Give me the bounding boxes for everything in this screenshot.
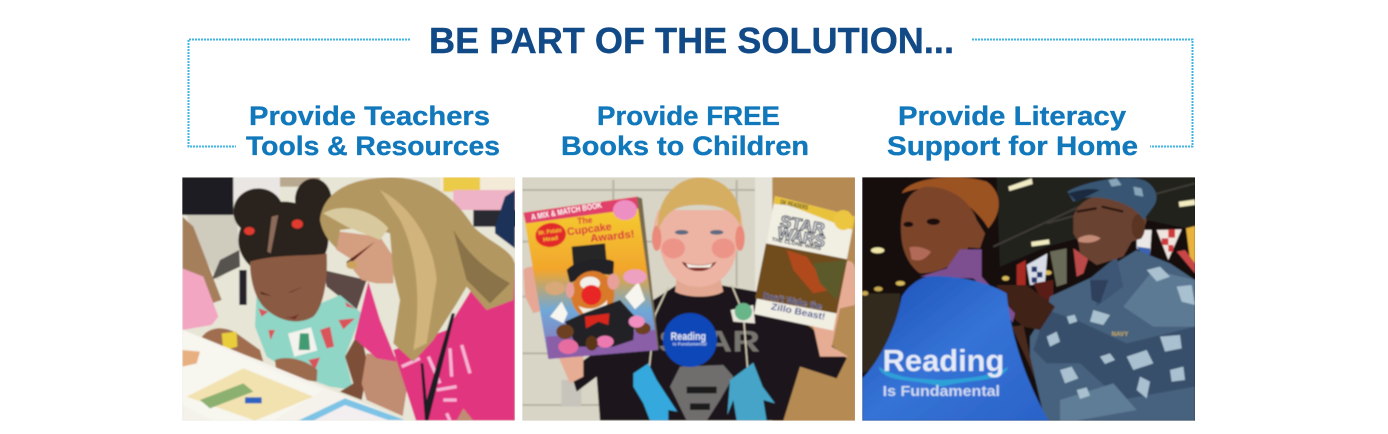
book 1 cover text: The (577, 215, 593, 226)
heading: free books column: Provide FREE (597, 101, 780, 131)
shirt print (illegible in source, drawn as strokes) (402, 345, 470, 421)
heading: teachers column: Tools & Resources (246, 131, 500, 161)
child collar (920, 249, 1015, 323)
arms and hands (523, 266, 540, 314)
teacher face (335, 231, 394, 284)
photo: teacher reading with girl (180, 170, 520, 427)
teacher arm & shirt (362, 353, 407, 416)
child face (901, 187, 985, 273)
man face (1073, 194, 1147, 265)
book 2 cover text (762, 199, 827, 322)
title: BE PART OF THE SOLUTION... (429, 20, 954, 61)
heading: free books column (561, 101, 809, 161)
photo: navy sailor and child in cape (860, 170, 1200, 427)
cape logo (878, 348, 1008, 398)
cape logo: Is Fundamental (883, 384, 1000, 400)
face (654, 210, 743, 287)
man cap (1067, 178, 1157, 220)
uniform name tape: NAVY (1112, 331, 1129, 338)
girl arms (200, 328, 263, 362)
photo: boy holding books (520, 170, 860, 427)
book 1 cover text: Awards! (590, 228, 635, 245)
left book (523, 197, 658, 359)
book 2 cover text: Don't Wake the (762, 290, 823, 312)
signal flags (1027, 253, 1047, 285)
girl face (250, 253, 327, 321)
heading: literacy support column (887, 101, 1138, 161)
heading: free books column: Books to Children (561, 131, 809, 161)
heading: literacy support column: Provide Literacy (898, 101, 1126, 131)
child hair (902, 177, 999, 228)
heading: literacy support column: Support for Home (887, 131, 1138, 161)
heading: teachers column (246, 101, 500, 161)
neck (675, 277, 723, 297)
yarn necklace and medallion (649, 285, 748, 378)
book 1 cover text: Cupcake (566, 221, 612, 238)
right book (754, 196, 855, 331)
dotted frame: right bracket (972, 40, 1192, 146)
heading: teachers column: Provide Teachers (249, 101, 490, 131)
book (182, 332, 388, 420)
photo: boy holding books: Is Fundamental (673, 341, 707, 347)
teacher hair (320, 177, 515, 362)
girl hair (232, 188, 282, 229)
man body camo (1030, 250, 1195, 421)
book 2 cover text: STAR (779, 213, 826, 239)
girl dress (255, 293, 362, 390)
book 2 cover text: WARS (776, 225, 827, 251)
blue cape (862, 276, 1049, 421)
cape logo: Reading (883, 344, 1004, 378)
shirt lettering: STAR (658, 326, 760, 359)
paper hands (633, 363, 677, 421)
book 2 cover text: THE CLONE WARS (771, 237, 822, 252)
book 2 cover text: DK READERS (780, 199, 809, 212)
blue circle badge (663, 313, 717, 367)
dotted frame: left bracket (188, 40, 410, 146)
book 1 cover text: Head (543, 236, 559, 244)
book 1 cover text (530, 200, 635, 245)
book 2 cover text: Zillo Beast! (770, 301, 826, 322)
potato head (572, 243, 607, 267)
book 1 cover text: Mr. Potato (538, 228, 562, 237)
book 1 cover text: A MIX & MATCH BOOK (530, 200, 603, 222)
badge logo: Reading (671, 331, 706, 343)
shirt (570, 285, 847, 421)
ceiling lights (1008, 178, 1033, 191)
man hand (997, 285, 1055, 330)
